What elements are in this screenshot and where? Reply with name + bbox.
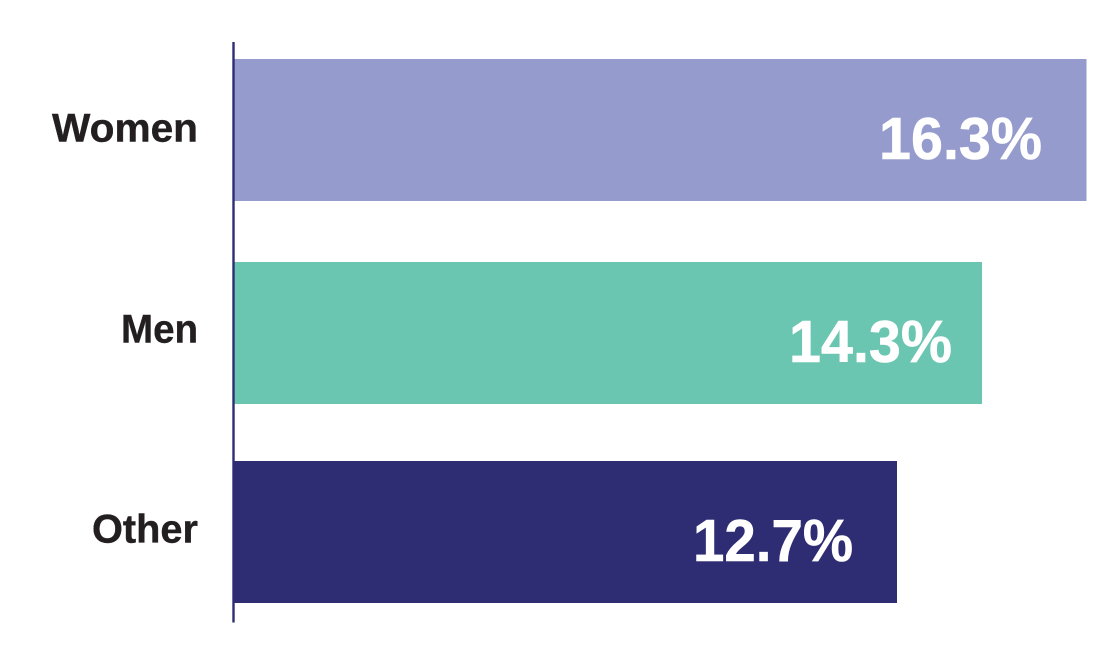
label: Men: Men bbox=[121, 308, 198, 352]
bar: Other: 12.7% bbox=[693, 508, 853, 574]
label: Other: Other bbox=[92, 508, 198, 552]
bar: Women: 16.3% bbox=[879, 106, 1042, 172]
axis line bbox=[232, 42, 235, 622]
bar: Women bbox=[233, 59, 1086, 201]
bar: Men bbox=[233, 262, 982, 404]
bar: Men: 14.3% bbox=[789, 309, 952, 375]
label: Women: Women bbox=[52, 106, 198, 150]
bar: Other bbox=[233, 461, 897, 603]
